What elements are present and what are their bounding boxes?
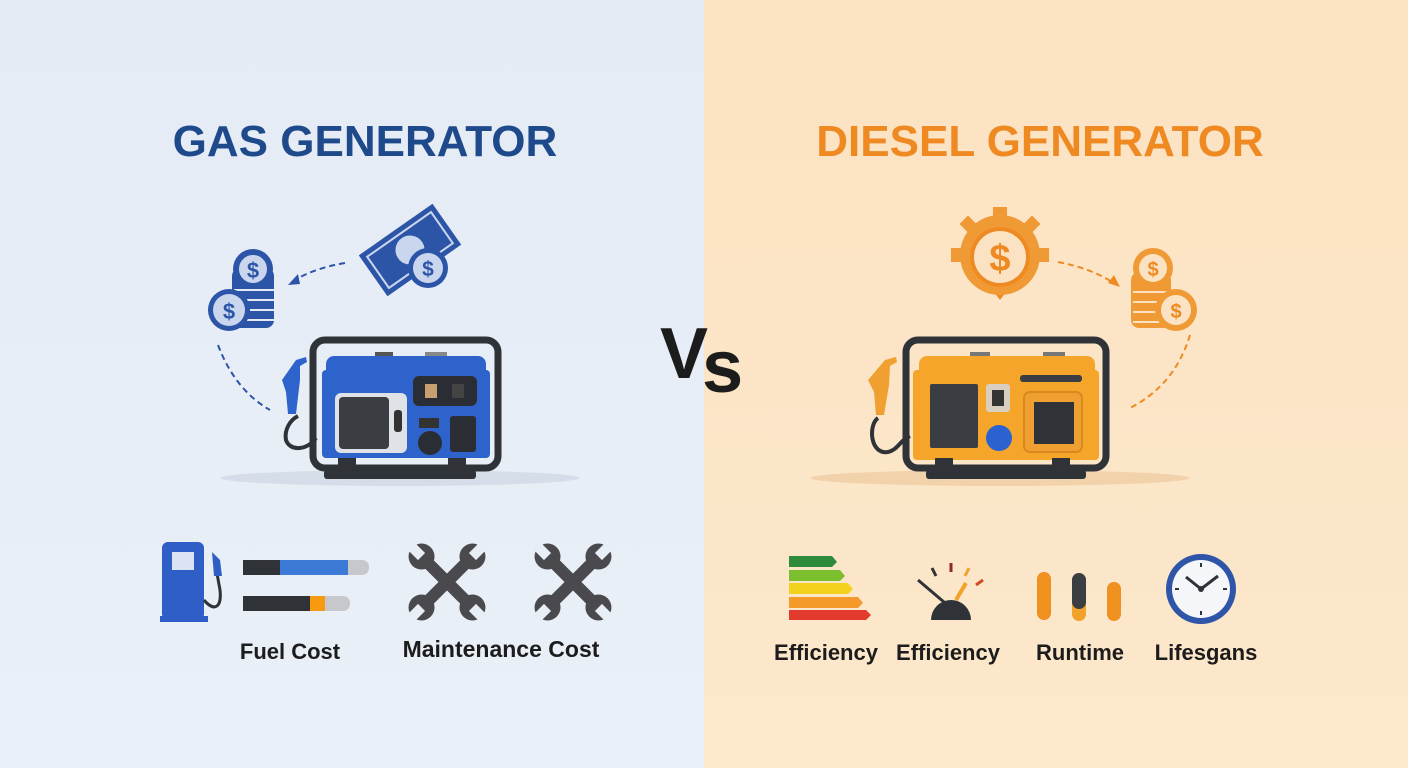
icon: dollar gear pin (diesel): $ <box>989 238 1011 280</box>
shadow gas generator <box>220 470 580 486</box>
arrow: gear to coins <box>1058 262 1190 408</box>
icon: fuel nozzle (diesel) <box>868 357 910 452</box>
vs label <box>660 314 743 408</box>
icon: gas generator <box>313 340 498 479</box>
icon: dollar gear pin (diesel) <box>951 207 1049 300</box>
arrow: bill to coins <box>218 263 345 410</box>
icon: coin stack (gas) <box>208 249 274 331</box>
icon: gauge <box>918 563 983 620</box>
title: gas generator: GAS GENERATOR <box>173 117 557 166</box>
shadow diesel generator <box>810 470 1190 486</box>
background right <box>704 0 1408 768</box>
icon: crossed wrenches 2 <box>527 536 619 628</box>
icon: clock <box>1166 554 1236 624</box>
icon: energy rating bars <box>789 556 871 620</box>
icon: banknote with coin (gas) <box>359 204 461 296</box>
icon: fuel nozzle (gas) <box>282 357 316 448</box>
icon: crossed wrenches 1 <box>401 536 493 628</box>
icon: coin stack (diesel) <box>1131 248 1197 331</box>
label: runtime: Runtime <box>1036 640 1124 665</box>
label: fuel cost: Fuel Cost <box>240 639 341 664</box>
label: lifespans: Lifesgans <box>1155 640 1257 665</box>
icon: banknote with coin (gas): $ <box>422 258 434 281</box>
label: maintenance cost: Maintenance Cost <box>403 636 600 662</box>
label: efficiency 2: Efficiency <box>896 640 1001 665</box>
vs label: s <box>702 325 743 408</box>
label: efficiency 1: Efficiency <box>774 640 879 665</box>
icon: runtime pills <box>1037 572 1121 621</box>
icon: coin stack (diesel): $ <box>1147 259 1159 281</box>
icon: diesel generator <box>906 340 1106 479</box>
vs label: V <box>660 314 708 394</box>
icon: coin stack (gas): $ <box>223 299 235 324</box>
icon: coin stack (gas): $ <box>247 258 259 283</box>
icon: coin stack (diesel): $ <box>1170 301 1182 323</box>
icon: fuel pump <box>160 542 222 622</box>
title: diesel generator: DIESEL GENERATOR <box>816 117 1264 166</box>
fuel cost bars <box>243 560 369 611</box>
background left <box>0 0 704 768</box>
